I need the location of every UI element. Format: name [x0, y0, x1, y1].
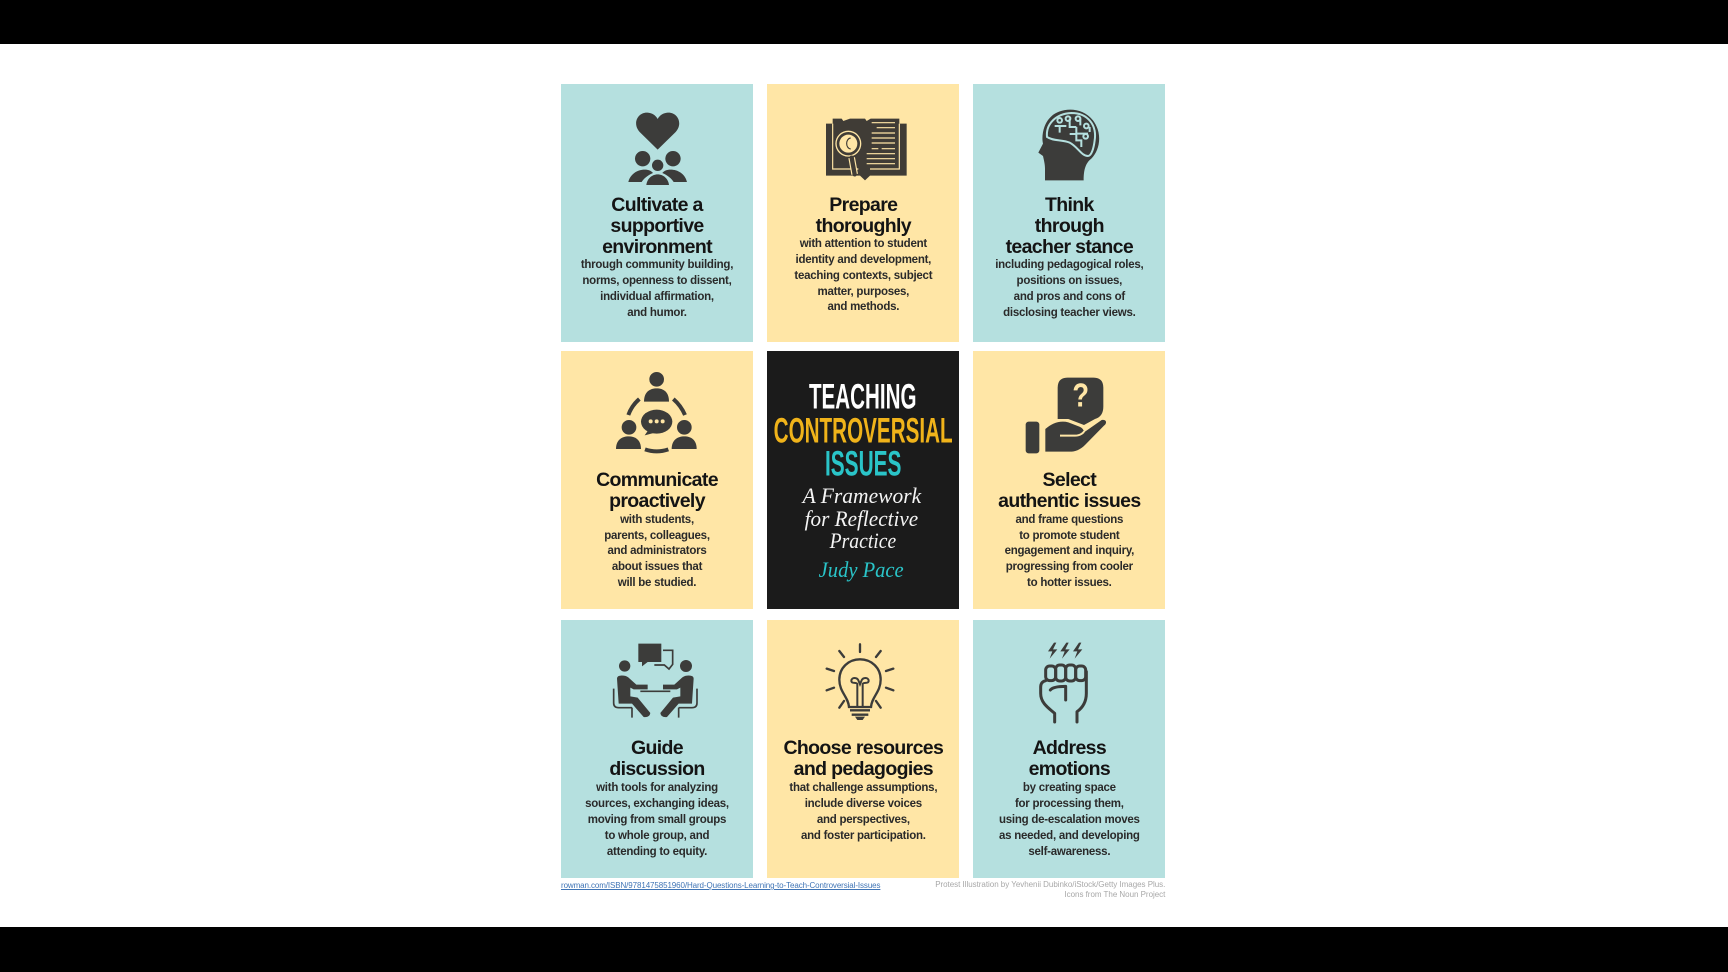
- body text: by creating space: [1023, 782, 1116, 794]
- book title: ISSUES: [825, 445, 902, 484]
- heading: Address: [1033, 737, 1106, 759]
- body text: engagement and inquiry,: [1005, 545, 1134, 557]
- book title: TEACHING: [809, 377, 917, 416]
- body text: [789, 782, 937, 842]
- book title: CONTROVERSIAL: [774, 411, 953, 450]
- image credit: [935, 880, 1166, 898]
- body text: norms, openness to dissent,: [582, 275, 732, 287]
- icon: hand holding question mark: [1026, 378, 1106, 454]
- body text: include diverse voices: [805, 798, 922, 810]
- panel: choose resources and pedagogies: [767, 620, 959, 878]
- body text: and pros and cons of: [1014, 291, 1125, 303]
- body text: individual affirmation,: [600, 291, 714, 303]
- heading: Choose resources: [783, 737, 943, 759]
- body text: and foster participation.: [801, 830, 926, 842]
- panel: prepare thoroughly: [767, 84, 959, 342]
- heading: [609, 737, 705, 780]
- source link: rowman.com/ISBN/9781475851960/Hard-Questions-Learning-to-Teach-Controversial-Issues: [561, 881, 880, 890]
- heading: teacher stance: [1006, 236, 1133, 258]
- heading: [602, 194, 712, 258]
- panel: select authentic issues: [973, 351, 1165, 609]
- image credit: Icons from The Noun Project: [1064, 890, 1165, 898]
- body text: attending to equity.: [607, 846, 707, 858]
- heading: authentic issues: [998, 490, 1141, 512]
- icon: light bulb: [826, 643, 894, 720]
- heading: proactively: [609, 490, 705, 512]
- subtitle: for Reflective: [805, 506, 919, 531]
- subtitle: [801, 483, 923, 553]
- body text: with students,: [620, 514, 694, 526]
- heading: supportive: [610, 214, 704, 236]
- body text: identity and development,: [796, 254, 931, 266]
- image credit: Protest Illustration by Yevhenii Dubinko/iStock/Getty Images Plus.: [935, 880, 1165, 889]
- body text: parents, colleagues,: [604, 530, 710, 542]
- heading: thoroughly: [816, 214, 911, 236]
- heading: Think: [1045, 194, 1094, 216]
- body text: [999, 782, 1140, 858]
- body text: to whole group, and: [605, 830, 709, 842]
- body text: and perspectives,: [817, 814, 910, 826]
- panel: cultivate a supportive environment: [561, 84, 753, 342]
- heading: discussion: [609, 758, 705, 780]
- panel: guide discussion: [561, 620, 753, 878]
- author: Judy Pace: [819, 557, 904, 582]
- heading: Select: [1043, 468, 1096, 490]
- heading: environment: [602, 236, 712, 258]
- heading: Cultivate a: [611, 194, 703, 216]
- body text: to hotter issues.: [1027, 577, 1112, 589]
- body text: [995, 259, 1143, 319]
- body text: to promote student: [1019, 530, 1119, 542]
- icon: three people around speech bubble: [616, 372, 697, 454]
- body text: and frame questions: [1015, 514, 1123, 526]
- icon: hand holding question mark: ?: [1072, 378, 1089, 415]
- body text: including pedagogical roles,: [995, 259, 1143, 271]
- body text: self-awareness.: [1028, 846, 1110, 858]
- icon: raised fist with lightning bolts: [1039, 642, 1088, 724]
- body text: matter, purposes,: [818, 286, 909, 298]
- heading: Guide: [631, 737, 683, 759]
- body text: for processing them,: [1015, 798, 1124, 810]
- body text: sources, exchanging ideas,: [585, 798, 729, 810]
- body text: and administrators: [607, 545, 707, 557]
- body text: and humor.: [627, 307, 687, 319]
- heading: [1006, 194, 1134, 258]
- body text: teaching contexts, subject: [794, 270, 932, 282]
- panel: think through teacher stance: [973, 84, 1165, 342]
- body text: positions on issues,: [1017, 275, 1122, 287]
- body text: progressing from cooler: [1006, 561, 1133, 573]
- icon: heart above people: [628, 112, 687, 185]
- panel: address emotions: [973, 620, 1165, 878]
- body text: and methods.: [827, 301, 899, 313]
- body text: [1005, 514, 1134, 589]
- heading: Prepare: [829, 194, 897, 216]
- book title: [774, 377, 953, 484]
- heading: [1029, 737, 1110, 780]
- body text: with attention to student: [800, 238, 927, 250]
- heading: Communicate: [596, 468, 718, 490]
- body text: [794, 238, 932, 313]
- heading: and pedagogies: [794, 758, 933, 780]
- icon: two people talking at table: [612, 644, 698, 718]
- body text: will be studied.: [618, 577, 696, 589]
- heading: emotions: [1029, 758, 1110, 780]
- bottom black bar: [0, 927, 1728, 972]
- heading: through: [1035, 214, 1104, 236]
- panel: book cover title: [767, 351, 959, 609]
- subtitle: A Framework: [801, 483, 923, 508]
- panel: communicate proactively: [561, 351, 753, 609]
- body text: [585, 782, 729, 858]
- body text: that challenge assumptions,: [789, 782, 937, 794]
- heading: [816, 194, 912, 236]
- icon: open book with magnifier: [826, 118, 907, 180]
- body text: using de-escalation moves: [999, 814, 1140, 826]
- subtitle: Practice: [829, 528, 897, 553]
- body text: through community building,: [581, 259, 733, 271]
- body text: with tools for analyzing: [596, 782, 718, 794]
- icon: head with circuit brain: [1038, 110, 1100, 180]
- heading: [596, 468, 718, 512]
- heading: [783, 737, 944, 780]
- top black bar: [0, 0, 1728, 44]
- body text: about issues that: [612, 561, 702, 573]
- heading: [998, 468, 1141, 512]
- body text: moving from small groups: [588, 814, 726, 826]
- body text: as needed, and developing: [999, 830, 1140, 842]
- body text: [581, 259, 733, 319]
- body text: [604, 514, 710, 589]
- body text: disclosing teacher views.: [1003, 307, 1136, 319]
